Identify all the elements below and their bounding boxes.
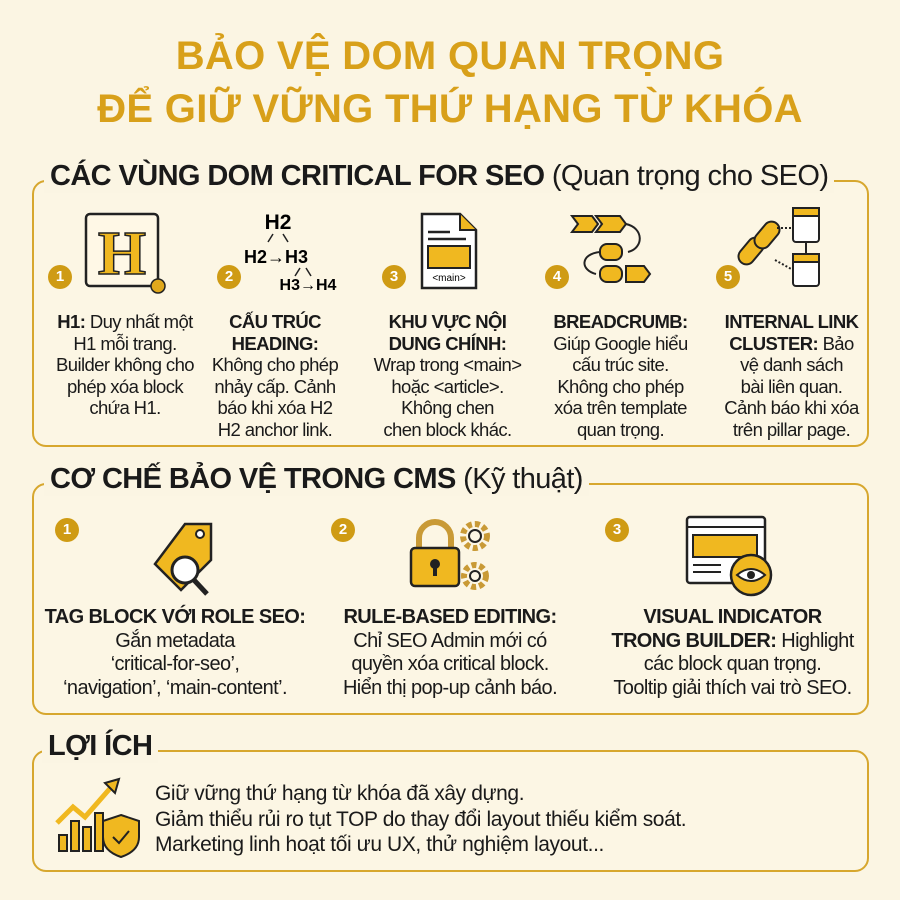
text: heading structure: Không cho phép: [212, 354, 338, 375]
text: heading structure: CẤU TRÚC: [229, 311, 321, 332]
heading: critical regions: CÁC VÙNG DOM CRITICAL FOR SEO (Quan trọng cho SEO): [50, 160, 828, 192]
number 2: [217, 265, 241, 289]
text: main content: Không chen: [401, 397, 494, 418]
text: H1: chứa H1.: [89, 397, 161, 418]
text: benefits list: Giữ vững thứ hạng từ khóa đã xây dựng.: [155, 782, 524, 805]
text: breadcrumb: cấu trúc site.: [572, 354, 669, 375]
text: internal link: Cảnh báo khi xóa: [724, 397, 859, 418]
text: breadcrumb: [553, 311, 688, 440]
number 4: 4: [553, 268, 561, 285]
icon: tag search: [153, 522, 212, 596]
heading: CMS: CƠ CHẾ BẢO VỆ TRONG CMS (Kỹ thuật): [50, 463, 583, 495]
text: visual indicator: TRONG BUILDER: Highlight: [611, 630, 854, 652]
text: H1: Builder không cho: [56, 354, 194, 375]
text: breadcrumb: Không cho phép: [557, 376, 684, 396]
number 2: 2: [225, 268, 233, 285]
text: H1: H1: Duy nhất một: [57, 311, 193, 332]
icon: main document: <main>: [432, 273, 466, 284]
title: [97, 33, 803, 131]
icon: heading tree: H2: [265, 211, 291, 234]
number 1: 1: [63, 521, 71, 538]
icon: H1: H: [98, 220, 146, 288]
text: H1: H1 mỗi trang.: [73, 332, 177, 354]
title: BẢO VỆ DOM QUAN TRỌNG: [176, 34, 724, 78]
number 4: [545, 265, 569, 289]
text: rule-based: Chỉ SEO Admin mới có: [353, 630, 547, 652]
text: heading structure: báo khi xóa H2: [217, 397, 332, 418]
number 2: 2: [339, 521, 347, 538]
text: main content: DUNG CHÍNH:: [389, 332, 506, 354]
panel: CMS protection: [32, 483, 869, 715]
text: tag block: TAG BLOCK VỚI ROLE SEO:: [45, 606, 305, 628]
number 3: [382, 265, 406, 289]
text: main content: KHU VỰC NỘI: [389, 311, 506, 332]
number 5: [716, 265, 740, 289]
text: tag block: [44, 604, 305, 698]
number 3: 3: [390, 268, 398, 285]
text: main content: hoặc <article>.: [391, 376, 504, 396]
panel: critical DOM regions: [32, 180, 869, 447]
text: visual indicator: các block quan trọng.: [644, 653, 821, 675]
icon: heading tree: [244, 211, 337, 294]
text: internal link: INTERNAL LINK: [725, 311, 858, 332]
number 5: 5: [724, 268, 732, 285]
text: heading structure: HEADING:: [232, 332, 318, 354]
number 3: 3: [613, 521, 621, 538]
text: benefits list: [155, 782, 686, 856]
text: tag block: ‘critical-for-seo’,: [111, 653, 239, 675]
icon: growth chart shield: [55, 778, 140, 858]
text: visual indicator: Tooltip giải thích vai trò SEO.: [613, 676, 852, 698]
heading: benefits: LỢI ÍCH: [48, 730, 152, 762]
text: tag block: ‘navigation’, ‘main-content’.: [63, 676, 287, 698]
text: H1: [56, 311, 194, 418]
text: rule-based: RULE-BASED EDITING:: [343, 606, 557, 628]
number 3: [605, 518, 629, 542]
icon: H1: [84, 212, 166, 294]
text: internal link: bài liên quan.: [741, 376, 842, 396]
text: H1: phép xóa block: [67, 376, 183, 396]
text: main content: [374, 311, 522, 440]
number 2: [331, 518, 355, 542]
text: breadcrumb: BREADCRUMB:: [553, 311, 688, 332]
text: internal link: vệ danh sách: [740, 354, 843, 375]
text: internal link: trên pillar page.: [733, 418, 850, 440]
icon: main document: [420, 212, 478, 290]
text: visual indicator: [611, 606, 854, 698]
text: tag block: Gắn metadata: [115, 630, 235, 652]
icon: lock gears: [410, 519, 490, 590]
text: rule-based: [343, 606, 557, 698]
icon: heading tree: H3→H4: [280, 277, 337, 294]
text: heading structure: H2 anchor link.: [218, 418, 332, 440]
icon: heading tree: H2→H3: [244, 247, 308, 267]
number 1: 1: [56, 268, 64, 285]
icon: breadcrumb: [570, 215, 652, 283]
text: main content: chen block khác.: [383, 418, 512, 440]
panel: benefits: [32, 750, 869, 872]
text: breadcrumb: quan trọng.: [577, 418, 664, 440]
text: benefits list: Marketing linh hoạt tối ưu UX, thử nghiệm layout...: [155, 833, 604, 856]
text: heading structure: [212, 311, 338, 440]
icon: browser eye: [686, 516, 772, 596]
text: benefits list: Giảm thiểu rủi ro tụt TOP do thay đổi layout thiếu kiểm soát.: [155, 808, 686, 830]
number 1: [55, 518, 79, 542]
icon: link cluster: [738, 207, 820, 287]
number 1: [48, 265, 72, 289]
text: breadcrumb: xóa trên template: [554, 397, 687, 418]
text: main content: Wrap trong <main>: [374, 354, 521, 375]
text: internal link: CLUSTER: Bảo: [729, 332, 854, 354]
text: rule-based: Hiển thị pop-up cảnh báo.: [343, 676, 557, 698]
text: visual indicator: VISUAL INDICATOR: [643, 606, 822, 628]
text: breadcrumb: Giúp Google hiểu: [553, 332, 688, 354]
text: heading structure: nhảy cấp. Cảnh: [214, 376, 336, 396]
text: internal link: [724, 311, 860, 440]
title: ĐỂ GIỮ VỮNG THỨ HẠNG TỪ KHÓA: [97, 87, 803, 131]
text: rule-based: quyền xóa critical block.: [351, 653, 549, 675]
